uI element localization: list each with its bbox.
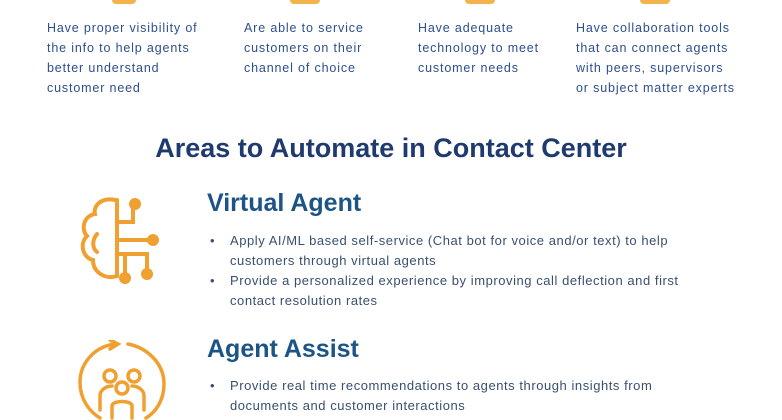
heading: Virtual Agent: Virtual Agent <box>207 189 361 217</box>
text: visibility <box>47 21 197 95</box>
text: visibility: customer need <box>47 81 141 95</box>
text: collaboration: or subject matter experts <box>576 81 735 95</box>
icon: brain <box>80 197 159 284</box>
text: technology <box>418 21 539 75</box>
text: technology: customer needs <box>418 61 519 75</box>
text: technology: technology to meet <box>418 41 539 55</box>
text: channel: channel of choice <box>244 61 356 75</box>
text: visibility: better understand <box>47 61 159 75</box>
text: visibility: Have proper visibility of <box>47 21 197 35</box>
text: collaboration: with peers, supervisors <box>576 61 723 75</box>
text: channel: customers on their <box>244 41 362 55</box>
text: visibility: the info to help agents <box>47 41 190 55</box>
icon: top orange fragments <box>112 0 670 4</box>
bullets: Agent Assist <box>210 378 652 413</box>
bullets: Virtual Agent: Provide a personalized experience by improving call deflection and first <box>230 273 679 288</box>
text: channel <box>244 21 364 75</box>
text: collaboration: that can connect agents <box>576 41 728 55</box>
bullets: Virtual Agent: contact resolution rates <box>230 293 378 308</box>
icon: agent assist <box>78 340 166 420</box>
title: Areas to Automate in Contact Center <box>155 133 627 163</box>
bullets: Agent Assist: Provide real time recommendations to agents through insights from <box>230 378 652 393</box>
bullets: Agent Assist: documents and customer interactions <box>230 398 465 413</box>
heading: Agent Assist: Agent Assist <box>207 335 359 363</box>
bullets: Virtual Agent: Apply AI/ML based self-service (Chat bot for voice and/or text) to help <box>230 233 668 248</box>
text: channel: Are able to service <box>244 21 364 35</box>
bullets: Virtual Agent <box>210 233 679 308</box>
text: collaboration <box>576 21 735 95</box>
text: collaboration: Have collaboration tools <box>576 21 730 35</box>
text: technology: Have adequate <box>418 21 514 35</box>
bullets: Virtual Agent: customers through virtual agents <box>230 253 436 268</box>
